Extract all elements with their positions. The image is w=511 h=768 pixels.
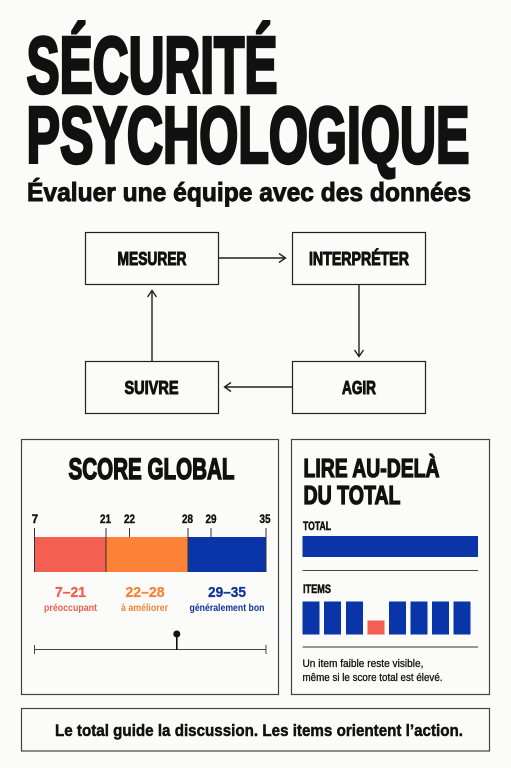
note text: Un item faible reste visible, (302, 658, 424, 670)
step: interpréter: INTERPRÉTER (309, 248, 409, 269)
note text (302, 658, 442, 684)
total label: TOTAL (303, 521, 331, 533)
title (26, 20, 470, 180)
range: à améliorer: à améliorer (121, 603, 168, 614)
item bars (302, 602, 470, 634)
arrow: mesurer to interpréter (219, 254, 286, 262)
range: préoccupant: 7–21 (55, 584, 86, 601)
step: suivre: SUIVRE (124, 378, 178, 398)
scale numbers: 7 (32, 514, 38, 526)
heading: lire au-delà du total: DU TOTAL (304, 480, 401, 510)
arrow: agir to suivre (224, 382, 292, 392)
items label: ITEMS (303, 584, 331, 596)
range: à améliorer: 22–28 (126, 584, 164, 601)
segmented score bar (34, 528, 266, 572)
panel: score global (22, 440, 278, 694)
takeaway banner (22, 708, 490, 751)
step: mesurer: MESURER (118, 249, 186, 269)
step: agir: AGIR (342, 378, 376, 398)
scale numbers: 29 (206, 514, 216, 526)
range: préoccupant (44, 584, 98, 614)
step: interpréter (292, 232, 426, 284)
scale numbers: 22 (124, 514, 135, 526)
title: SÉCURITÉ (26, 20, 278, 110)
step: agir (292, 362, 426, 414)
note text: même si le score total est élevé. (302, 672, 442, 684)
scale numbers: 21 (100, 514, 112, 526)
step: mesurer (86, 232, 218, 284)
range: généralement bon (190, 584, 264, 614)
cycle diagram (86, 232, 426, 414)
heading: lire au-delà du total (304, 453, 440, 510)
score marker on axis (34, 630, 266, 654)
range: généralement bon: 29–35 (208, 584, 246, 601)
heading: lire au-delà du total: LIRE AU-DELÀ (304, 453, 440, 483)
range: préoccupant: préoccupant (44, 603, 98, 614)
range: généralement bon: généralement bon (190, 603, 264, 614)
panel: lire au-delà du total (292, 440, 490, 694)
takeaway banner: Le total guide la discussion. Les items orientent l’action. (55, 721, 463, 740)
range: à améliorer (121, 584, 168, 614)
scale numbers: 28 (182, 514, 194, 526)
scale numbers: 35 (260, 514, 271, 526)
total bar (302, 536, 478, 557)
step: suivre (86, 362, 218, 414)
heading: score global: SCORE GLOBAL (68, 453, 234, 486)
arrow: suivre to mesurer (148, 290, 156, 361)
scale numbers (32, 514, 271, 526)
arrow: interpréter to agir (354, 285, 364, 356)
subtitle: Évaluer une équipe avec des données (27, 177, 471, 207)
